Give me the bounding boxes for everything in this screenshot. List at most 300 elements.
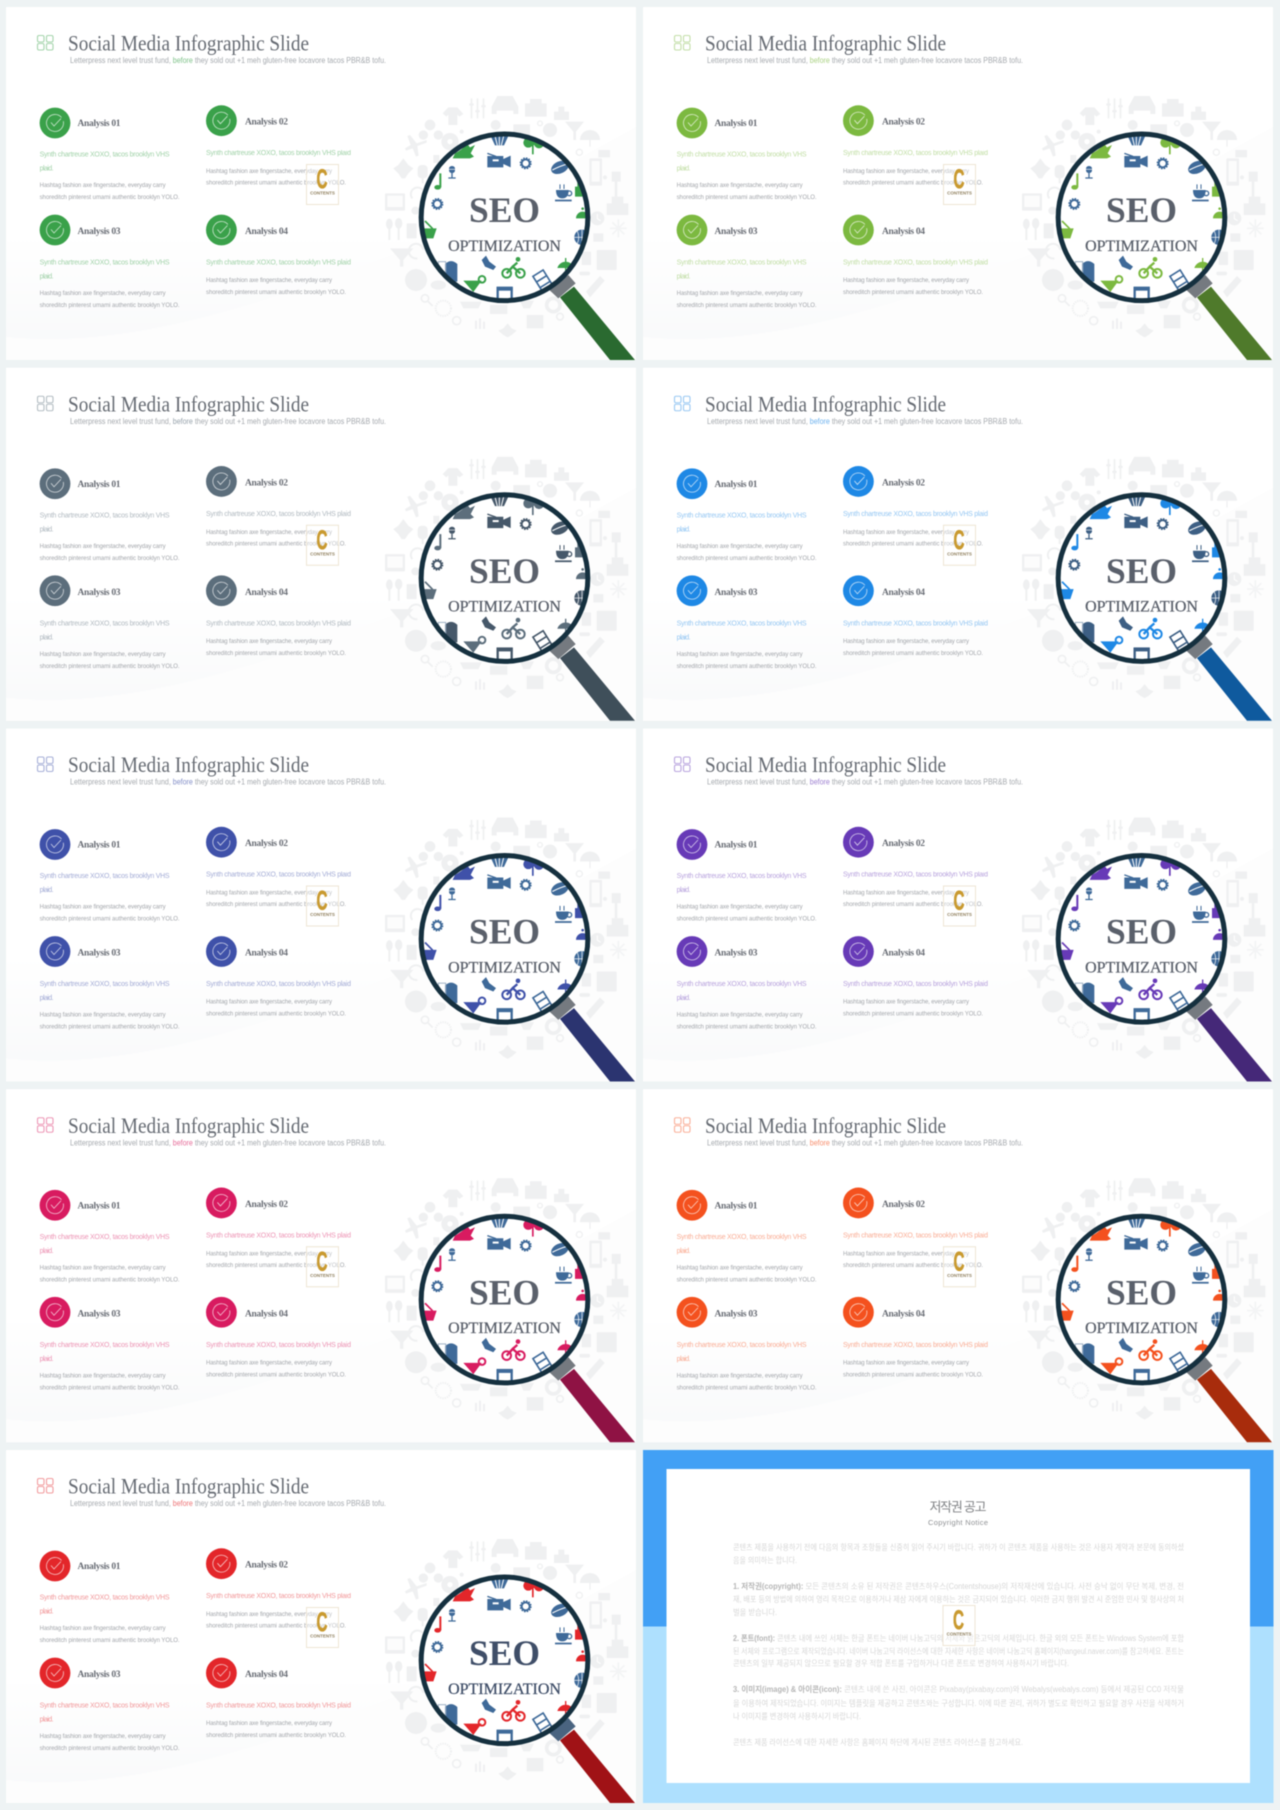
item: Analysis 01: Analysis 01 (714, 840, 758, 850)
title: Social Media Infographic Slide (705, 1113, 946, 1138)
magnifier: SEO optimization (385, 96, 635, 360)
item: Analysis 02: Synth chartreuse XOXO, tacos brooklyn VHS plaid (206, 1232, 351, 1239)
item: Analysis 04 (843, 1297, 988, 1378)
text block: intro: 콘텐츠 제품을 사용하기 전에 다음의 항목과 조항들을 신중히 읽어 주시기 바랍니다. 귀하가 이 콘텐츠 제품을 사용하는 것은 사용자 계약과 본문에 동의하셨 (733, 1542, 1185, 1552)
item: Analysis 03: Hashtag fashion axe fingerstache, everyday carry (677, 1012, 803, 1018)
magnifier: SEO optimization: SEO (469, 912, 540, 952)
item: Analysis 04: Synth chartreuse XOXO, tacos brooklyn VHS plaid (206, 1342, 351, 1349)
item: Analysis 01: Analysis 01 (78, 119, 121, 129)
item: Analysis 04: Synth chartreuse XOXO, tacos brooklyn VHS plaid (843, 981, 988, 988)
item: Analysis 04: Analysis 04 (882, 1309, 925, 1319)
text block: license note: 콘텐츠 제품 라이선스에 대한 자세한 사항은 홈페이지 하단에 게시된 콘텐츠 라이선스를 참고하세요. (733, 1737, 1023, 1747)
item: Analysis 03: Analysis 03 (78, 227, 121, 237)
magnifier: SEO optimization: OPTIMIZATION (448, 599, 561, 616)
text block: images and icons: 3. 이미지(image) & 아이콘(icon): 콘텐츠 내에 쓴 사진, 아이콘은 Pixabay(pixabay.com)와 Webalys(webalys.com) 등에서 제공된 CC0 저작물 (733, 1684, 1184, 1694)
item: Analysis 02 (843, 105, 988, 186)
item: Analysis 04: Hashtag fashion axe fingerstache, everyday carry (843, 278, 969, 284)
item: Analysis 04: shoreditch pinterest umami authentic brooklyn YOLO. (206, 290, 346, 296)
item: Analysis 03: Synth chartreuse XOXO, tacos brooklyn VHS (40, 1342, 170, 1349)
item: Analysis 01: shoreditch pinterest umami authentic brooklyn YOLO. (40, 1638, 180, 1644)
item: Analysis 02: shoreditch pinterest umami authentic brooklyn YOLO. (206, 1624, 346, 1630)
item: Analysis 02: shoreditch pinterest umami authentic brooklyn YOLO. (843, 541, 983, 547)
item: Analysis 03: plaid. (40, 274, 54, 280)
item: Analysis 04: shoreditch pinterest umami authentic brooklyn YOLO. (206, 651, 346, 657)
item: Analysis 04: Synth chartreuse XOXO, tacos brooklyn VHS plaid (206, 1702, 351, 1710)
item: Analysis 01: plaid. (677, 526, 691, 533)
slide 8: orange (643, 1089, 1273, 1442)
item: Analysis 04: shoreditch pinterest umami authentic brooklyn YOLO. (843, 290, 983, 296)
item: Analysis 02: Synth chartreuse XOXO, tacos brooklyn VHS plaid (206, 1593, 351, 1600)
title: Social Media Infographic Slide (68, 1113, 309, 1138)
item: Analysis 01 (677, 468, 817, 562)
item: Analysis 01: Synth chartreuse XOXO, tacos brooklyn VHS (677, 512, 807, 519)
item: Analysis 02: shoreditch pinterest umami authentic brooklyn YOLO. (206, 180, 346, 186)
item: Analysis 04 (206, 1297, 351, 1378)
item: Analysis 02 (843, 466, 988, 547)
item: Analysis 01: Analysis 01 (714, 119, 758, 129)
item: Analysis 04: Analysis 04 (245, 227, 288, 237)
watermark: C (954, 525, 964, 555)
watermark: CONTENTS (310, 551, 335, 556)
item: Analysis 04: Hashtag fashion axe fingerstache, everyday carry (843, 639, 969, 645)
item: Analysis 03: shoreditch pinterest umami authentic brooklyn YOLO. (677, 664, 817, 670)
item: Analysis 02: Analysis 02 (245, 478, 288, 488)
item: Analysis 01: Hashtag fashion axe fingerstache, everyday carry (677, 904, 803, 910)
item: Analysis 04: Hashtag fashion axe fingerstache, everyday carry (206, 1360, 332, 1366)
item: Analysis 02: Hashtag fashion axe fingerstache, everyday carry (206, 530, 332, 536)
item: Analysis 03: shoreditch pinterest umami authentic brooklyn YOLO. (40, 664, 180, 670)
item: Analysis 03: Hashtag fashion axe fingerstache, everyday carry (677, 291, 803, 297)
watermark: C (316, 164, 328, 194)
item: Analysis 03: Hashtag fashion axe fingerstache, everyday carry (677, 1373, 803, 1379)
icon: grid (674, 396, 690, 411)
item: Analysis 04: Synth chartreuse XOXO, tacos brooklyn VHS plaid (843, 260, 988, 266)
item: Analysis 03: Analysis 03 (714, 948, 758, 958)
text block: font: 된 서체와 프로그램으로 제작되었습니다. 네이버 나눔고딕 라이선스에 대한 자세한 사항은 네이버 나눔고딕 홈페이지(hangeul.naver.com)를 참고하세요. 폰트는 (733, 1646, 1184, 1656)
subtitle: Letterpress next level trust fund, before they sold out +1 meh gluten-free locavore tacos PBR&B tofu. (707, 417, 1023, 426)
item: Analysis 02 (206, 1188, 351, 1269)
item: Analysis 04: Synth chartreuse XOXO, tacos brooklyn VHS plaid (206, 981, 351, 988)
item: Analysis 03 (677, 215, 817, 309)
magnifier: SEO optimization: SEO (1106, 1272, 1177, 1312)
text block: copyright: 재, 배포 등의 방법에 의하여 영리 목적으로 이용하거나 제삼 자에게 이용하는 것은 금지되어 있습니다. 이러한 금지 행위 발견 시 준엄한 민사 및 형사상의 처 (733, 1594, 1184, 1604)
title: Social Media Infographic Slide (705, 752, 946, 777)
heading: copyright subtitle: Copyright Notice (928, 1518, 988, 1527)
text block: font: 2. 폰트(font): 콘텐츠 내에 쓰인 서체는 한글 폰트는 네이버 나눔고딕의 서체와 맑은고딕의 서체입니다. 한글 외의 모든 폰트는 Windows System에 포함 (733, 1633, 1185, 1643)
item: Analysis 02: Analysis 02 (882, 839, 925, 849)
item: Analysis 04: shoreditch pinterest umami authentic brooklyn YOLO. (843, 651, 983, 657)
item: Analysis 01: Synth chartreuse XOXO, tacos brooklyn VHS (677, 152, 807, 158)
item: Analysis 01 (40, 1551, 180, 1644)
item: Analysis 03 (677, 575, 817, 670)
item: Analysis 02: Analysis 02 (245, 118, 288, 128)
item: Analysis 04: Synth chartreuse XOXO, tacos brooklyn VHS plaid (206, 620, 351, 627)
item: Analysis 03 (40, 1658, 180, 1752)
title: Social Media Infographic Slide (705, 30, 946, 56)
item: Analysis 01 (677, 829, 817, 922)
watermark (944, 525, 976, 565)
item: Analysis 01: shoreditch pinterest umami authentic brooklyn YOLO. (677, 916, 817, 922)
watermark: C (954, 164, 964, 194)
item: Analysis 01: shoreditch pinterest umami authentic brooklyn YOLO. (40, 916, 180, 922)
item: Analysis 04: Analysis 04 (882, 588, 925, 598)
watermark: CONTENTS (947, 1273, 972, 1278)
item: Analysis 03: Hashtag fashion axe fingerstache, everyday carry (40, 1734, 166, 1740)
magnifier: SEO optimization: SEO (469, 551, 540, 591)
item: Analysis 03 (677, 936, 817, 1030)
item: Analysis 03: plaid. (40, 1356, 54, 1363)
item: Analysis 01: Hashtag fashion axe fingerstache, everyday carry (40, 1626, 166, 1632)
item: Analysis 03: Hashtag fashion axe fingerstache, everyday carry (677, 652, 803, 658)
watermark: CONTENTS (310, 912, 335, 917)
watermark: C (316, 886, 328, 916)
item: Analysis 01: shoreditch pinterest umami authentic brooklyn YOLO. (40, 1277, 180, 1283)
item: Analysis 02: Analysis 02 (882, 478, 925, 488)
item: Analysis 01: Analysis 01 (78, 1562, 121, 1572)
item: Analysis 01: Synth chartreuse XOXO, tacos brooklyn VHS (40, 1594, 170, 1602)
item: Analysis 03: Analysis 03 (78, 1670, 121, 1680)
magnifier: SEO optimization (1022, 1178, 1272, 1442)
item: Analysis 04: Synth chartreuse XOXO, tacos brooklyn VHS plaid (843, 1342, 988, 1349)
magnifier: SEO optimization: OPTIMIZATION (448, 959, 561, 976)
item: Analysis 02: Hashtag fashion axe fingerstache, everyday carry (206, 1251, 332, 1257)
watermark (306, 1246, 338, 1287)
watermark: CONTENTS (310, 1634, 335, 1638)
item: Analysis 02 (206, 466, 351, 547)
item: Analysis 04: Analysis 04 (245, 948, 288, 958)
item: Analysis 02: shoreditch pinterest umami authentic brooklyn YOLO. (843, 902, 983, 908)
magnifier: SEO optimization: SEO (1106, 912, 1177, 952)
item: Analysis 04: Hashtag fashion axe fingerstache, everyday carry (206, 1000, 332, 1006)
item: Analysis 04: shoreditch pinterest umami authentic brooklyn YOLO. (843, 1012, 983, 1018)
magnifier: SEO optimization: SEO (469, 190, 540, 230)
item: Analysis 03: Synth chartreuse XOXO, tacos brooklyn VHS (40, 260, 170, 266)
item: Analysis 02: Hashtag fashion axe fingerstache, everyday carry (843, 1251, 969, 1257)
item: Analysis 01: plaid. (40, 166, 54, 172)
item: Analysis 01: shoreditch pinterest umami authentic brooklyn YOLO. (677, 1277, 817, 1283)
title: Social Media Infographic Slide (68, 30, 309, 56)
item: Analysis 03: Synth chartreuse XOXO, tacos brooklyn VHS (40, 1702, 170, 1710)
text block: copyright (733, 1581, 1184, 1617)
watermark (306, 886, 338, 926)
slide 3: slate (6, 368, 636, 721)
item: Analysis 04: shoreditch pinterest umami authentic brooklyn YOLO. (206, 1012, 346, 1018)
item: Analysis 01: Synth chartreuse XOXO, tacos brooklyn VHS (40, 1234, 170, 1241)
item: Analysis 03: Synth chartreuse XOXO, tacos brooklyn VHS (677, 620, 807, 627)
item: Analysis 01: plaid. (40, 1248, 54, 1255)
item: Analysis 04: shoreditch pinterest umami authentic brooklyn YOLO. (206, 1733, 346, 1739)
item: Analysis 01: Hashtag fashion axe fingerstache, everyday carry (40, 904, 166, 910)
item: Analysis 01: Analysis 01 (714, 480, 758, 490)
item: Analysis 03 (40, 1297, 180, 1391)
watermark: C (316, 525, 328, 555)
item: Analysis 01 (40, 468, 180, 562)
subtitle: Letterpress next level trust fund, before they sold out +1 meh gluten-free locavore tacos PBR&B tofu. (70, 56, 386, 65)
subtitle: Letterpress next level trust fund, before they sold out +1 meh gluten-free locavore tacos PBR&B tofu. (707, 1138, 1023, 1147)
item: Analysis 01 (40, 829, 180, 922)
item: Analysis 01: Synth chartreuse XOXO, tacos brooklyn VHS (677, 1234, 807, 1241)
icon: grid (38, 396, 53, 411)
icon: grid (38, 36, 53, 50)
item: Analysis 01: plaid. (40, 1608, 54, 1616)
item: Analysis 02: Synth chartreuse XOXO, tacos brooklyn VHS plaid (206, 872, 351, 878)
item: Analysis 02: shoreditch pinterest umami authentic brooklyn YOLO. (206, 902, 346, 908)
item: Analysis 03: plaid. (677, 634, 691, 641)
item: Analysis 03: Hashtag fashion axe fingerstache, everyday carry (40, 1012, 166, 1018)
item: Analysis 02: shoreditch pinterest umami authentic brooklyn YOLO. (843, 180, 983, 186)
item: Analysis 02: shoreditch pinterest umami authentic brooklyn YOLO. (206, 1263, 346, 1269)
subtitle: Letterpress next level trust fund, before they sold out +1 meh gluten-free locavore tacos PBR&B tofu. (70, 417, 386, 426)
item: Analysis 02 (206, 1548, 351, 1630)
item: Analysis 02: Analysis 02 (882, 1200, 925, 1210)
magnifier: SEO optimization: OPTIMIZATION (1085, 959, 1198, 976)
magnifier: SEO optimization (385, 1178, 635, 1442)
watermark (944, 1246, 976, 1287)
slide 4: blue (643, 368, 1273, 721)
magnifier: SEO optimization (385, 1539, 635, 1803)
item: Analysis 03: Analysis 03 (78, 588, 121, 598)
item: Analysis 02: shoreditch pinterest umami authentic brooklyn YOLO. (206, 541, 346, 547)
item: Analysis 01 (677, 108, 817, 201)
watermark (944, 164, 976, 204)
item: Analysis 01: plaid. (677, 1248, 691, 1255)
item: Analysis 01: Synth chartreuse XOXO, tacos brooklyn VHS (40, 873, 170, 880)
panel: copyright notice (643, 1450, 1274, 1803)
item: Analysis 04: Hashtag fashion axe fingerstache, everyday carry (843, 1000, 969, 1006)
item: Analysis 04: Synth chartreuse XOXO, tacos brooklyn VHS plaid (843, 620, 988, 627)
subtitle: Letterpress next level trust fund, before they sold out +1 meh gluten-free locavore tacos PBR&B tofu. (707, 56, 1023, 65)
watermark (306, 525, 338, 565)
title: Social Media Infographic Slide (68, 752, 309, 777)
magnifier: SEO optimization: OPTIMIZATION (1085, 1320, 1198, 1337)
title: Social Media Infographic Slide (705, 391, 946, 416)
slide 6: purple (643, 728, 1273, 1082)
watermark: C (954, 886, 964, 916)
item: Analysis 01: Analysis 01 (714, 1201, 758, 1211)
heading: copyright title: 저작권 공고 (930, 1500, 987, 1514)
text block: font: 콘텐츠의 일부 제공되지 않으므로 필요할 경우 적합 폰트를 구입하거나 다른 폰트로 변경하여 사용하시기 바랍니다. (733, 1658, 1069, 1668)
item: Analysis 02 (843, 827, 988, 908)
magnifier: SEO optimization: OPTIMIZATION (1085, 238, 1198, 255)
item: Analysis 01: shoreditch pinterest umami authentic brooklyn YOLO. (677, 556, 817, 562)
item: Analysis 01: shoreditch pinterest umami authentic brooklyn YOLO. (40, 195, 180, 201)
item: Analysis 02: Synth chartreuse XOXO, tacos brooklyn VHS plaid (843, 1232, 988, 1239)
item: Analysis 01: shoreditch pinterest umami authentic brooklyn YOLO. (40, 556, 180, 562)
watermark: CONTENTS (947, 190, 972, 196)
magnifier: SEO optimization: SEO (1106, 190, 1177, 230)
icon: grid (38, 1478, 53, 1493)
item: Analysis 04: shoreditch pinterest umami authentic brooklyn YOLO. (843, 1372, 983, 1378)
item: Analysis 01: Hashtag fashion axe fingerstache, everyday carry (40, 544, 166, 550)
item: Analysis 01: Analysis 01 (78, 480, 121, 490)
item: Analysis 01: plaid. (677, 887, 691, 894)
item: Analysis 03 (40, 936, 180, 1030)
watermark: C (316, 1246, 328, 1276)
title: Social Media Infographic Slide (68, 391, 309, 416)
watermark: CONTENTS (310, 190, 335, 196)
item: Analysis 04 (843, 215, 988, 296)
item: Analysis 01 (40, 108, 180, 201)
item: Analysis 03: shoreditch pinterest umami authentic brooklyn YOLO. (40, 1746, 180, 1752)
magnifier: SEO optimization: OPTIMIZATION (1085, 599, 1198, 616)
item: Analysis 02 (206, 827, 351, 908)
item: Analysis 02: Synth chartreuse XOXO, tacos brooklyn VHS plaid (843, 150, 988, 157)
item: Analysis 04 (206, 1658, 351, 1739)
item: Analysis 01: Hashtag fashion axe fingerstache, everyday carry (677, 1265, 803, 1271)
text block: font (733, 1633, 1185, 1668)
item: Analysis 01: Synth chartreuse XOXO, tacos brooklyn VHS (677, 873, 807, 880)
item: Analysis 03: plaid. (677, 995, 691, 1002)
item: Analysis 01: Analysis 01 (78, 1201, 121, 1211)
item: Analysis 01: Synth chartreuse XOXO, tacos brooklyn VHS (40, 512, 170, 519)
watermark: C (954, 1246, 964, 1276)
item: Analysis 03: Synth chartreuse XOXO, tacos brooklyn VHS (677, 1342, 807, 1349)
item: Analysis 02: Analysis 02 (245, 1560, 288, 1570)
watermark (306, 164, 338, 204)
text block: intro (733, 1542, 1185, 1565)
item: Analysis 03: Synth chartreuse XOXO, tacos brooklyn VHS (40, 981, 170, 988)
item: Analysis 01: Hashtag fashion axe fingerstache, everyday carry (40, 183, 166, 189)
text block: copyright: 1. 저작권(copyright): 모든 콘텐츠의 소유 된 저작권은 콘텐츠하우스(Contentshouse)의 저작재산에 있습니다. 사전 승낙 없이 무단 복제, 변경, 전 (733, 1581, 1184, 1591)
item: Analysis 02: Hashtag fashion axe fingerstache, everyday carry (843, 530, 969, 536)
subtitle: Letterpress next level trust fund, before they sold out +1 meh gluten-free locavore tacos PBR&B tofu. (70, 1138, 386, 1147)
item: Analysis 03: shoreditch pinterest umami authentic brooklyn YOLO. (677, 1024, 817, 1030)
subtitle: Letterpress next level trust fund, before they sold out +1 meh gluten-free locavore tacos PBR&B tofu. (70, 1499, 386, 1508)
item: Analysis 02: Analysis 02 (245, 839, 288, 849)
item: Analysis 03: Hashtag fashion axe fingerstache, everyday carry (40, 652, 166, 658)
text block: images and icons: 을 이용하여 제작되었습니다. 이미지는 템플릿을 제공하고 콘텐츠와는 구성합니다. 이에 따른 권리, 귀하가 별도로 확인하고 필요할 경우 사진을 삭제하거 (733, 1698, 1184, 1708)
text block: copyright: 벌을 받습니다. (733, 1607, 777, 1617)
magnifier: SEO optimization: OPTIMIZATION (448, 238, 561, 255)
icon: grid (38, 1118, 53, 1132)
magnifier: SEO optimization: OPTIMIZATION (448, 1320, 561, 1337)
item: Analysis 01: Hashtag fashion axe fingerstache, everyday carry (40, 1265, 166, 1271)
item: Analysis 02: Synth chartreuse XOXO, tacos brooklyn VHS plaid (843, 872, 988, 878)
magnifier: SEO optimization: SEO (469, 1272, 540, 1312)
item: Analysis 01: Analysis 01 (78, 840, 121, 850)
item: Analysis 03: Analysis 03 (714, 227, 758, 237)
item: Analysis 04: Analysis 04 (882, 948, 925, 958)
item: Analysis 03: Synth chartreuse XOXO, tacos brooklyn VHS (677, 981, 807, 988)
title: Social Media Infographic Slide (68, 1474, 309, 1498)
text block: images and icons (733, 1684, 1184, 1721)
item: Analysis 04: Analysis 04 (245, 1309, 288, 1319)
item: Analysis 01: plaid. (677, 166, 691, 172)
magnifier: SEO optimization (385, 817, 635, 1081)
watermark: CONTENTS (947, 551, 972, 556)
magnifier: SEO optimization (1022, 96, 1272, 360)
slide 9: red (6, 1450, 636, 1803)
item: Analysis 01: Hashtag fashion axe fingerstache, everyday carry (677, 183, 803, 189)
item: Analysis 02: Synth chartreuse XOXO, tacos brooklyn VHS plaid (206, 150, 351, 157)
item: Analysis 04: shoreditch pinterest umami authentic brooklyn YOLO. (206, 1372, 346, 1378)
icon: grid (674, 757, 690, 772)
icon: grid (674, 1118, 690, 1132)
watermark (944, 886, 976, 926)
item: Analysis 03: shoreditch pinterest umami authentic brooklyn YOLO. (677, 303, 817, 309)
item: Analysis 04: Synth chartreuse XOXO, tacos brooklyn VHS plaid (206, 260, 351, 266)
magnifier: SEO optimization: SEO (469, 1633, 540, 1673)
item: Analysis 03: shoreditch pinterest umami authentic brooklyn YOLO. (40, 1385, 180, 1391)
watermark: C (953, 1605, 964, 1635)
item: Analysis 03: plaid. (40, 1716, 54, 1724)
item: Analysis 02: Synth chartreuse XOXO, tacos brooklyn VHS plaid (206, 511, 351, 518)
item: Analysis 03: Analysis 03 (714, 1309, 758, 1319)
item: Analysis 03 (677, 1297, 817, 1391)
item: Analysis 03: shoreditch pinterest umami authentic brooklyn YOLO. (40, 1024, 180, 1030)
item: Analysis 04 (843, 575, 988, 657)
item: Analysis 04: Analysis 04 (245, 1670, 288, 1680)
item: Analysis 03 (40, 575, 180, 670)
item: Analysis 03: plaid. (40, 995, 54, 1002)
item: Analysis 01: Synth chartreuse XOXO, tacos brooklyn VHS (40, 152, 170, 158)
watermark (306, 1607, 338, 1648)
item: Analysis 01 (677, 1190, 817, 1283)
item: Analysis 03: plaid. (677, 274, 691, 280)
item: Analysis 03: Analysis 03 (78, 1309, 121, 1319)
subtitle: Letterpress next level trust fund, before they sold out +1 meh gluten-free locavore tacos PBR&B tofu. (70, 778, 386, 786)
magnifier: SEO optimization (385, 457, 635, 721)
watermark: CONTENTS (310, 1273, 335, 1278)
item: Analysis 02: Hashtag fashion axe fingerstache, everyday carry (843, 890, 969, 896)
item: Analysis 03 (40, 215, 180, 309)
item: Analysis 04 (206, 575, 351, 657)
item: Analysis 01: shoreditch pinterest umami authentic brooklyn YOLO. (677, 195, 817, 201)
text block: intro: 음을 의미하는 합니다. (733, 1555, 797, 1565)
item: Analysis 01 (40, 1190, 180, 1283)
item: Analysis 03: Analysis 03 (714, 588, 758, 598)
watermark: C (316, 1607, 328, 1637)
magnifier: SEO optimization: SEO (1106, 551, 1177, 591)
item: Analysis 04: Hashtag fashion axe fingerstache, everyday carry (843, 1360, 969, 1366)
item: Analysis 02: Synth chartreuse XOXO, tacos brooklyn VHS plaid (843, 511, 988, 518)
item: Analysis 03: shoreditch pinterest umami authentic brooklyn YOLO. (677, 1385, 817, 1391)
item: Analysis 02: Hashtag fashion axe fingerstache, everyday carry (843, 169, 969, 175)
item: Analysis 03: Synth chartreuse XOXO, tacos brooklyn VHS (40, 620, 170, 627)
icon: grid (674, 36, 690, 50)
item: Analysis 04: Hashtag fashion axe fingerstache, everyday carry (206, 278, 332, 284)
item: Analysis 02: Hashtag fashion axe fingerstache, everyday carry (206, 1612, 332, 1618)
slide 7: pink (6, 1089, 636, 1442)
slide 2: lime (643, 7, 1273, 360)
item: Analysis 02: Hashtag fashion axe fingerstache, everyday carry (206, 890, 332, 896)
slide 1: green (6, 7, 636, 360)
watermark: CONTENTS (947, 1632, 971, 1636)
watermark (943, 1605, 975, 1646)
item: Analysis 03: Analysis 03 (78, 948, 121, 958)
icon: grid (38, 757, 53, 772)
item: Analysis 03: plaid. (677, 1356, 691, 1363)
item: Analysis 02: Hashtag fashion axe fingerstache, everyday carry (206, 169, 332, 175)
item: Analysis 04 (206, 936, 351, 1018)
text block: images and icons: 나 이미지를 변경하여 사용하시기 바랍니다. (733, 1711, 861, 1721)
item: Analysis 01: Hashtag fashion axe fingerstache, everyday carry (677, 544, 803, 550)
item: Analysis 03: Hashtag fashion axe fingerstache, everyday carry (40, 1373, 166, 1379)
item: Analysis 02: shoreditch pinterest umami authentic brooklyn YOLO. (843, 1263, 983, 1269)
magnifier: SEO optimization (1022, 817, 1272, 1081)
magnifier: SEO optimization: OPTIMIZATION (448, 1681, 561, 1698)
item: Analysis 01: plaid. (40, 526, 54, 533)
item: Analysis 04: Hashtag fashion axe fingerstache, everyday carry (206, 1721, 332, 1727)
item: Analysis 04 (206, 215, 351, 296)
item: Analysis 04: Analysis 04 (245, 588, 288, 598)
subtitle: Letterpress next level trust fund, before they sold out +1 meh gluten-free locavore tacos PBR&B tofu. (707, 778, 1023, 786)
slide 5: indigo (6, 728, 636, 1082)
item: Analysis 03: shoreditch pinterest umami authentic brooklyn YOLO. (40, 303, 180, 309)
item: Analysis 04: Hashtag fashion axe fingerstache, everyday carry (206, 639, 332, 645)
item: Analysis 03: Hashtag fashion axe fingerstache, everyday carry (40, 291, 166, 297)
watermark: CONTENTS (947, 912, 972, 917)
